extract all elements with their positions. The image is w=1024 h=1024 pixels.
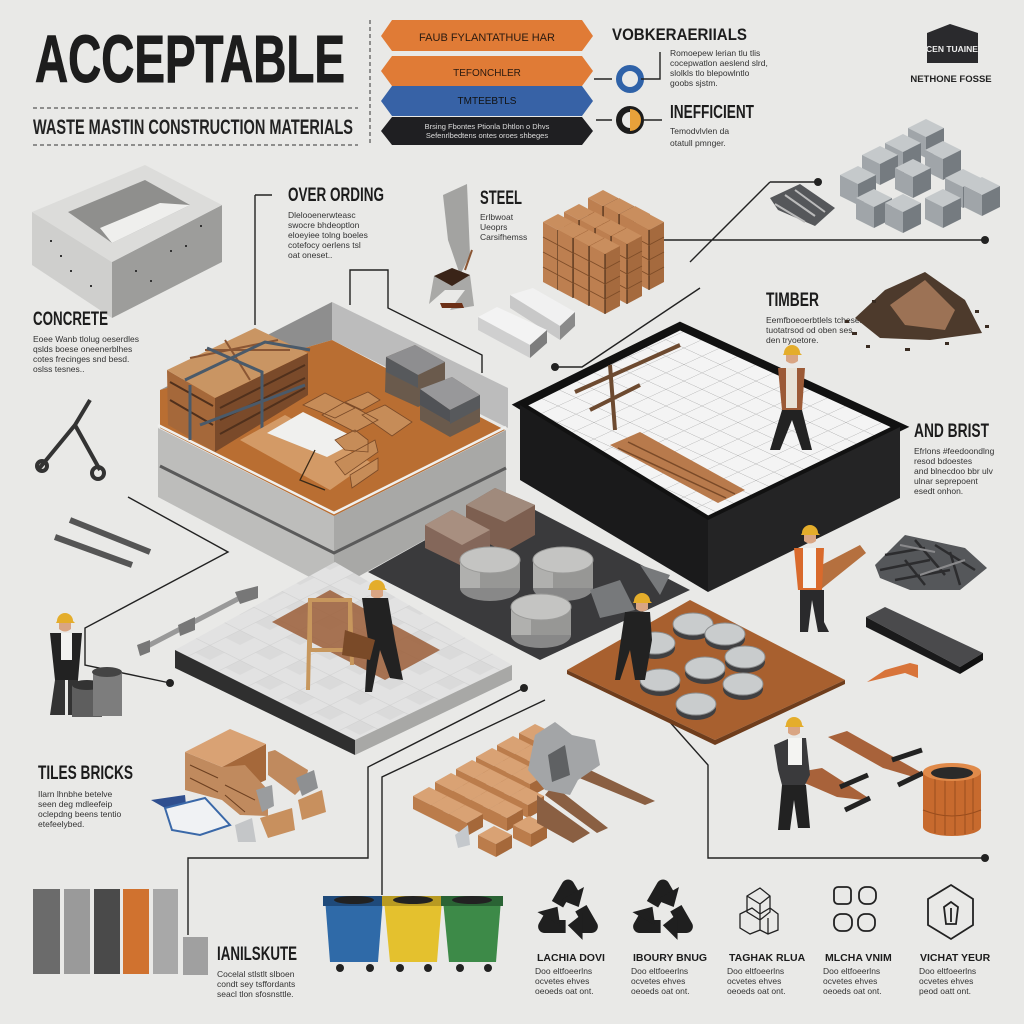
text: steel: Erlbwoat bbox=[480, 212, 514, 222]
bottom captions: MLCHA VNIM bbox=[825, 952, 892, 964]
icon: rods on line bbox=[137, 586, 258, 656]
text: over ording: Dlelooenerwteasc bbox=[288, 210, 356, 220]
bottom captions: peod oatt ont. bbox=[919, 986, 971, 996]
icon: recycle 2 bbox=[632, 886, 692, 940]
worker with barrels bbox=[50, 613, 122, 717]
timber stack bbox=[167, 328, 310, 452]
icon: cubes bbox=[740, 888, 778, 934]
icon: concrete block frame bbox=[32, 165, 222, 318]
ribbon banners: FAUB FYLANTATHUE HAR bbox=[419, 32, 555, 44]
legend: workermaterials: goobs sjstm. bbox=[670, 78, 718, 88]
legend: workermaterials bbox=[594, 25, 768, 90]
text: timber: den tryoetore. bbox=[766, 335, 818, 345]
text: tiles bricks: seen deg mdleefeip bbox=[38, 799, 112, 809]
bottom captions: ocvetes ehves bbox=[823, 976, 877, 986]
title bbox=[33, 20, 370, 145]
worker on pad bbox=[615, 593, 652, 680]
icon: steel anvil bbox=[429, 184, 474, 310]
bottom captions: ocvetes ehves bbox=[919, 976, 973, 986]
text: over ording: cotefocy oerlens tsl bbox=[288, 240, 361, 250]
badge top right: NETHONE FOSSE bbox=[910, 74, 992, 85]
icon: soil pile bbox=[845, 272, 989, 351]
icon: orange barrel bbox=[923, 763, 981, 836]
legend: workermaterials: cocepwatlon aeslend slrd, bbox=[670, 58, 768, 68]
ribbon banners: Sefenrlbedtens ontes oroes shbeges bbox=[426, 131, 548, 140]
text: landfill: condt sey tsffordants bbox=[217, 979, 295, 989]
text: tiles bricks bbox=[38, 763, 133, 829]
icon: brick stack bbox=[543, 190, 664, 314]
text: and brist: and blnecdoo bbr ulv bbox=[914, 466, 994, 476]
ribbon banners: Brsing Fbontes Ptionla Dhtlon o Dhvs bbox=[425, 122, 550, 131]
bottom captions: Doo eltfoeerlns bbox=[535, 966, 592, 976]
text: concrete: oslss tesnes.. bbox=[33, 364, 84, 374]
text: tiles bricks: TILES BRICKS bbox=[38, 763, 133, 784]
bottom captions: oeoeds oat ont. bbox=[727, 986, 786, 996]
icon: recycling bins bbox=[323, 896, 503, 972]
ribbon banners bbox=[381, 20, 593, 145]
icon: roller machine bbox=[770, 184, 835, 226]
icon: connected squares bbox=[834, 887, 876, 931]
diagram: dark floor bbox=[368, 495, 690, 660]
icon: hexagon bbox=[928, 885, 973, 939]
badge top right: CEN TUAINE bbox=[926, 44, 978, 54]
bottom captions: oeoeds oat ont. bbox=[631, 986, 690, 996]
legend: inefficient: Temodvlvlen da bbox=[670, 126, 729, 136]
badge top right bbox=[910, 24, 992, 85]
text: landfill: IANILSKUTE bbox=[217, 944, 297, 965]
text: and brist bbox=[914, 421, 995, 496]
text: and brist: ulnar seprepoent bbox=[914, 476, 978, 486]
text: and brist: Efrlons #feedoondlng bbox=[914, 446, 995, 456]
ribbon banners: TMTEEBTLS bbox=[458, 96, 517, 107]
text: timber: tuotatrsod od oben ses bbox=[766, 325, 852, 335]
text: concrete: CONCRETE bbox=[33, 309, 108, 330]
text: over ording bbox=[288, 185, 384, 260]
text: timber: TIMBER bbox=[766, 290, 819, 311]
icon: recycle 1 bbox=[537, 886, 597, 940]
bottom captions: LACHIA DOVI bbox=[537, 952, 605, 964]
legend: workermaterials: VOBKERAERIIALS bbox=[612, 25, 747, 44]
bottom captions: ocvetes ehves bbox=[631, 976, 685, 986]
text: concrete bbox=[33, 309, 139, 374]
title: WASTE MASTIN CONSTRUCTION MATERIALS bbox=[33, 116, 353, 139]
text: steel: STEEL bbox=[480, 188, 522, 209]
bottom captions: Doo eltfoeerlns bbox=[727, 966, 784, 976]
text: over ording: eloeyiee tolng boeles bbox=[288, 230, 368, 240]
text: concrete: cotes frecinges snd besd. bbox=[33, 354, 129, 364]
text: tiles bricks: oclepdng beens tentio bbox=[38, 809, 121, 819]
diagram: left materials pit bbox=[158, 302, 508, 590]
bottom captions: oeoeds oat ont. bbox=[535, 986, 594, 996]
icon: black beam bbox=[866, 607, 983, 682]
bottom captions: VICHAT YEUR bbox=[920, 952, 991, 964]
text: timber: Eemfboeoerbtlels tcheseas bbox=[766, 315, 869, 325]
icon: brick pile left bbox=[151, 729, 326, 842]
bottom captions: oeoeds oat ont. bbox=[823, 986, 882, 996]
diagram: black grid platform bbox=[520, 326, 900, 592]
legend: workermaterials: Romoepew lerian tlu tlis bbox=[670, 48, 760, 58]
text: steel: Carsifhemss bbox=[480, 232, 527, 242]
text: and brist: AND BRIST bbox=[914, 421, 989, 442]
diagram: tile floor bbox=[175, 562, 512, 755]
ribbon banners: TEFONCHLER bbox=[453, 68, 521, 79]
worker on platform bbox=[770, 345, 812, 450]
text: steel: Ueoprs bbox=[480, 222, 507, 232]
title: ACCEPTABLE bbox=[35, 22, 345, 97]
legend: inefficient: otatull pmnger. bbox=[670, 138, 726, 148]
icon: brick rows center bbox=[413, 722, 655, 857]
text: over ording: swocre bhdeoptlon bbox=[288, 220, 360, 230]
text: tiles bricks: etefeelybed. bbox=[38, 819, 84, 829]
text: and brist: esedt onhon. bbox=[914, 486, 963, 496]
diagram: orange pad with disks bbox=[567, 600, 845, 745]
icon: grapple tool bbox=[37, 400, 150, 565]
icon: rebar pile bbox=[875, 535, 987, 590]
bottom captions: Doo eltfoeerlns bbox=[919, 966, 976, 976]
text: tiles bricks: Ilarn lhnbhe betelve bbox=[38, 789, 112, 799]
connector lines bbox=[85, 178, 989, 935]
bottom captions bbox=[535, 952, 991, 996]
text: over ording: oat oneset.. bbox=[288, 250, 332, 260]
text: concrete: Eoee Wanb tlolug oeserdles bbox=[33, 334, 139, 344]
gray block stacks bbox=[385, 345, 480, 437]
bottom captions: ocvetes ehves bbox=[535, 976, 589, 986]
bottom captions: ocvetes ehves bbox=[727, 976, 781, 986]
bottom captions: Doo eltfoeerlns bbox=[823, 966, 880, 976]
center material crates and cylinders bbox=[425, 488, 670, 648]
legend: workermaterials: slolkls tlo blepowlntlo bbox=[670, 68, 750, 78]
text: concrete: qslds boese oneenerblhes bbox=[33, 344, 132, 354]
bottom captions: TAGHAK RLUA bbox=[729, 952, 806, 964]
slab and planks bbox=[240, 392, 412, 490]
text: timber bbox=[766, 290, 869, 345]
legend: inefficient: INEFFICIENT bbox=[670, 102, 754, 122]
bottom captions: IBOURY BNUG bbox=[633, 952, 707, 964]
text: landfill: Cocelal stlstlt slboen bbox=[217, 969, 295, 979]
text: landfill bbox=[217, 944, 297, 999]
icon: concrete slabs bbox=[478, 288, 575, 358]
bottom captions: Doo eltfoeerlns bbox=[631, 966, 688, 976]
stone cubes bbox=[840, 119, 1000, 233]
text: landfill: seacl tlon sfosnsttle. bbox=[217, 989, 294, 999]
text: over ording: OVER ORDING bbox=[288, 185, 384, 206]
worker with plank bbox=[774, 717, 923, 830]
text: and brist: resod bdoestes bbox=[914, 456, 972, 466]
legend: inefficient bbox=[596, 102, 754, 148]
icon: material bars bbox=[33, 889, 208, 975]
worker orange bbox=[794, 525, 866, 632]
text: steel bbox=[480, 188, 527, 242]
